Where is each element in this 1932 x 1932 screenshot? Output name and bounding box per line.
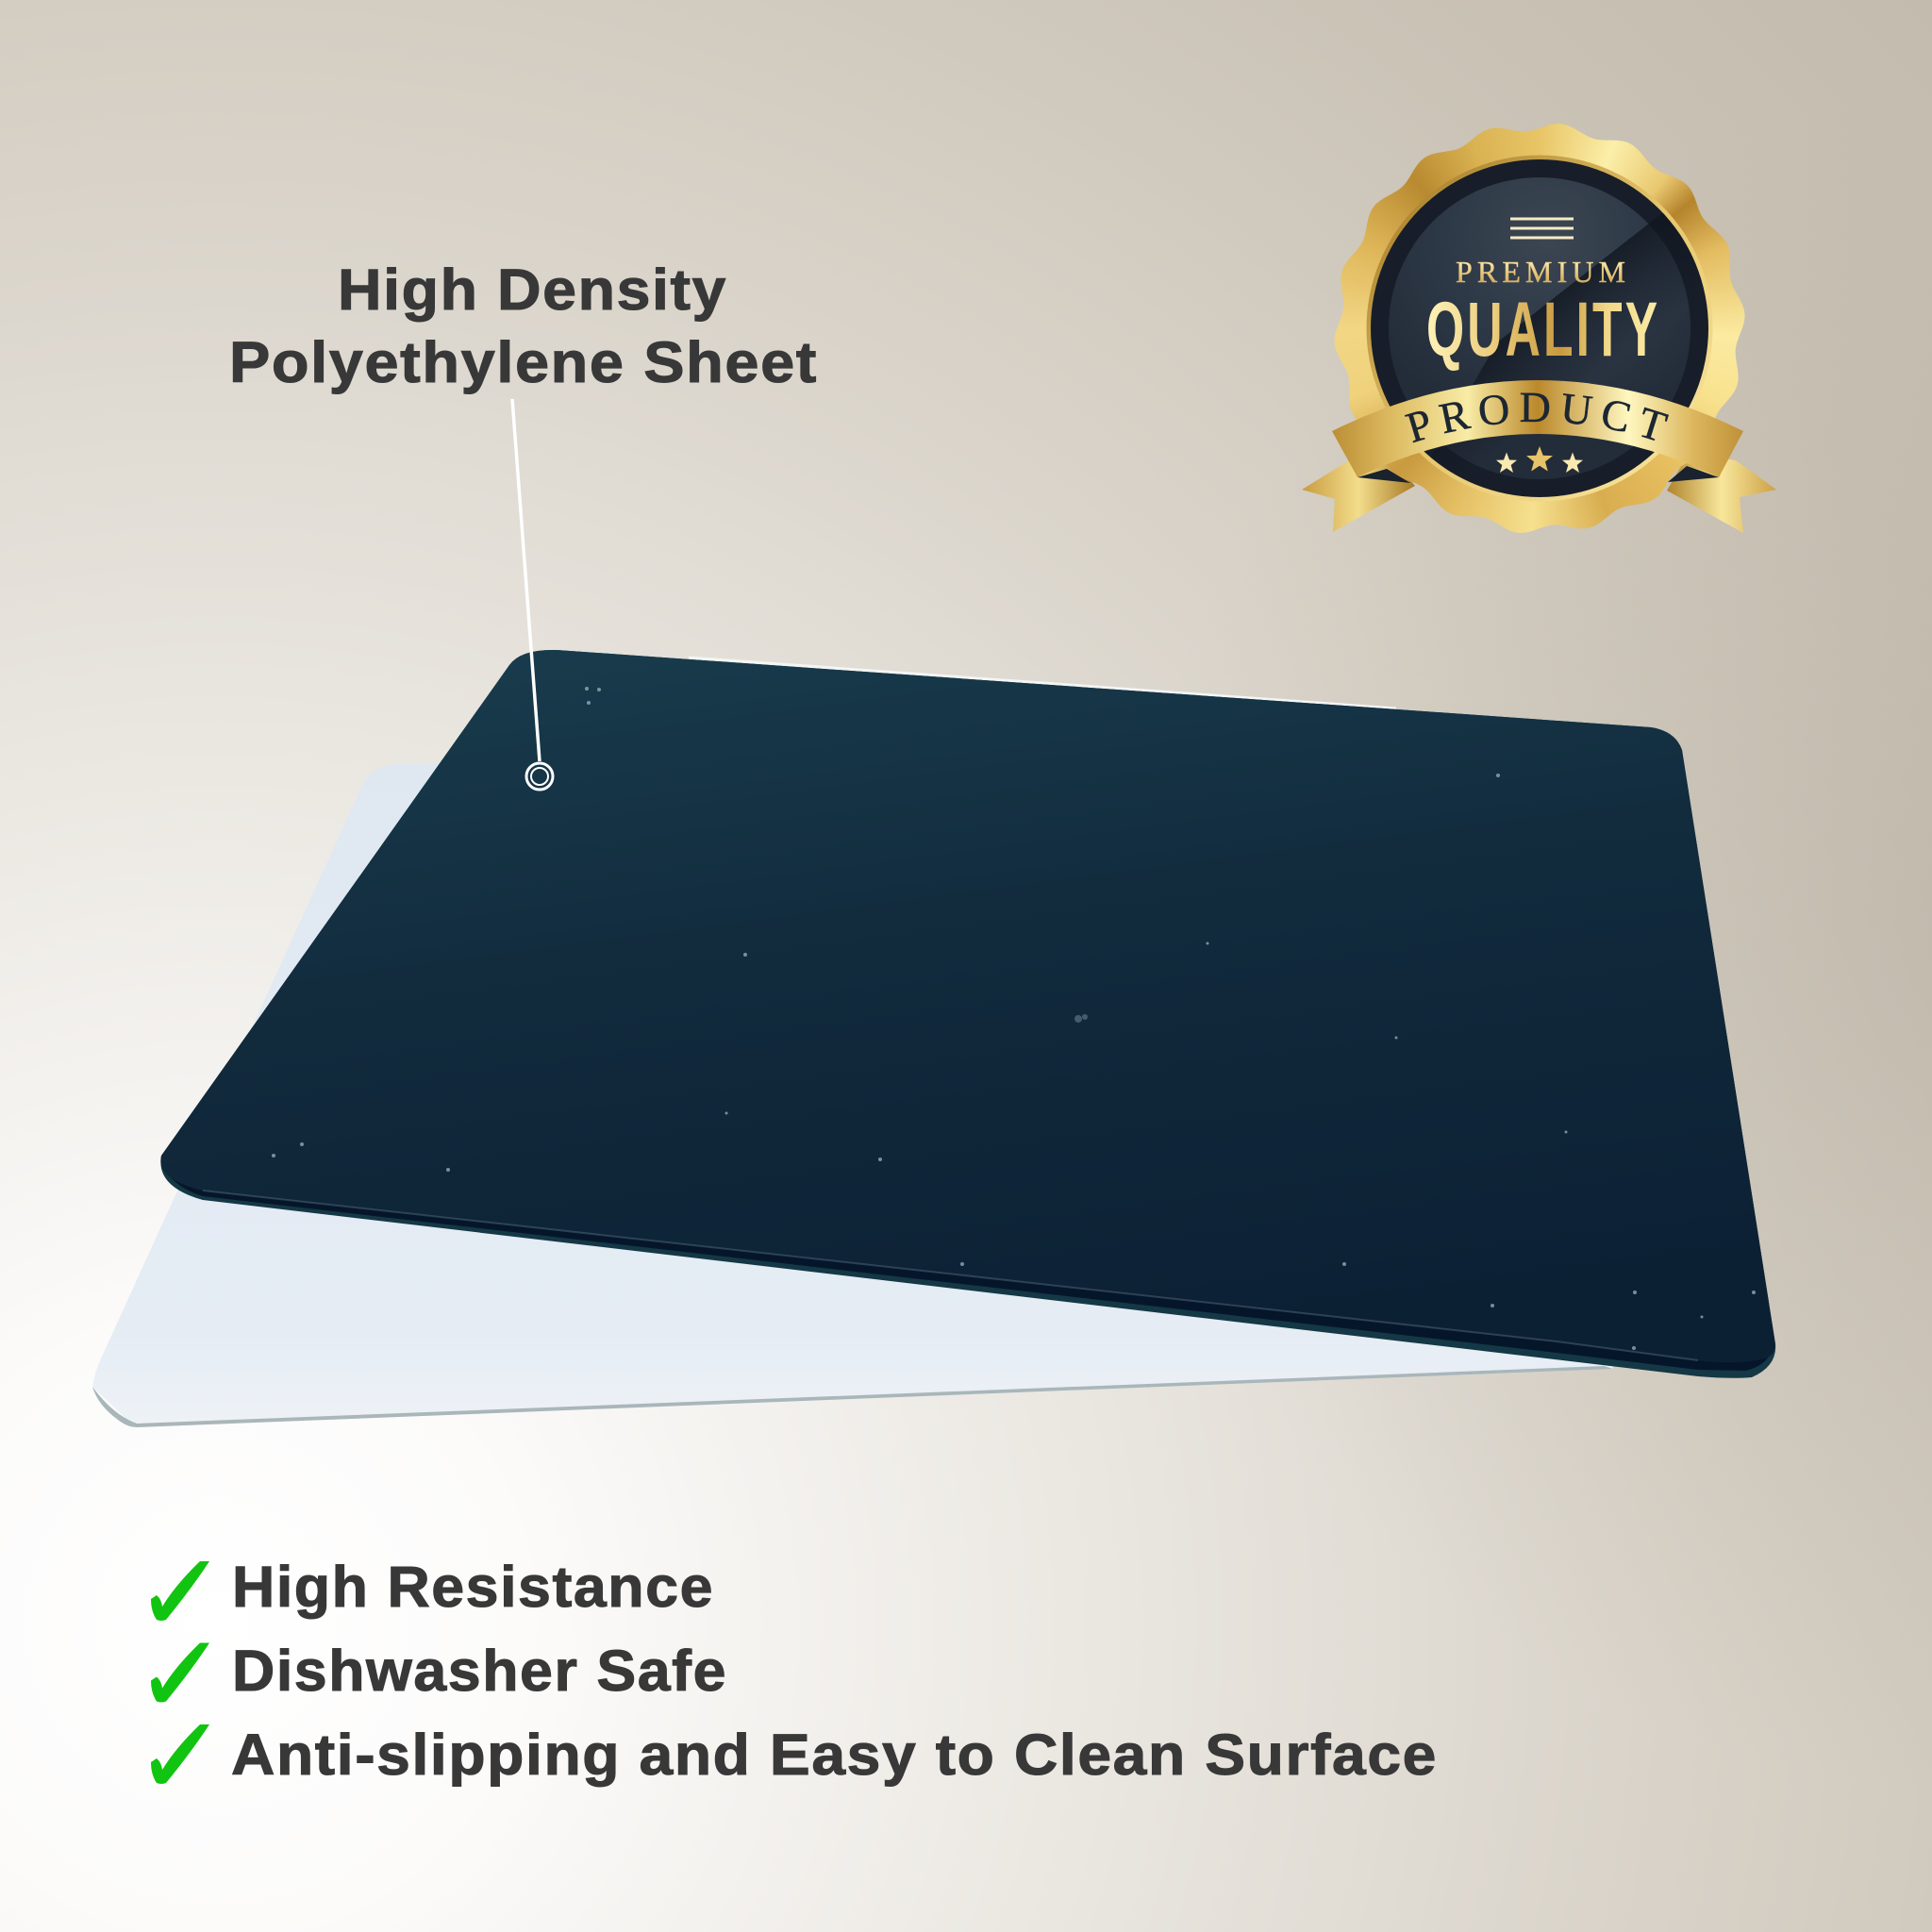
feature: Anti-slipping and Easy to Clean Surface: Anti-slipping and Easy to Clean Surface [231, 1723, 1438, 1787]
white cutting board [92, 658, 1613, 1427]
gold inner rim [1366, 155, 1713, 502]
heading: High Density Polyethylene Sheet [229, 258, 818, 394]
ribbon tails [1302, 453, 1776, 533]
ribbon fold shadows [1357, 466, 1719, 483]
board top face [160, 650, 1775, 1362]
QUALITY: QUALITY [1426, 286, 1657, 373]
premium quality badge [1302, 124, 1776, 533]
icon: check mark [151, 1643, 209, 1702]
feature list [151, 1555, 1438, 1787]
PRODUCT: PRODUCT [1404, 392, 1669, 443]
stars [1496, 446, 1583, 473]
PREMIUM: PREMIUM [1456, 255, 1625, 289]
heading: High Density Polyethylene Sheet: Polyethylene Sheet [229, 330, 818, 394]
callout line and marker [512, 399, 553, 790]
black cutting board [160, 650, 1775, 1378]
scalloped gold seal [1334, 124, 1745, 533]
gold arc banner [1332, 380, 1743, 477]
surface specks [272, 687, 1756, 1350]
three lines ornament [1510, 219, 1574, 238]
inner disc with gloss [1389, 177, 1699, 479]
heading: High Density Polyethylene Sheet: High Density [338, 258, 727, 322]
icon: check mark [151, 1724, 209, 1784]
dark disc [1371, 159, 1708, 497]
board edge thickness [160, 650, 1775, 1378]
product arc baseline [1396, 422, 1679, 449]
icon: check mark [151, 1561, 209, 1621]
infographic canvas [92, 124, 1776, 1787]
feature: High Resistance: High Resistance [232, 1555, 714, 1619]
feature: Dishwasher Safe: Dishwasher Safe [232, 1639, 727, 1703]
